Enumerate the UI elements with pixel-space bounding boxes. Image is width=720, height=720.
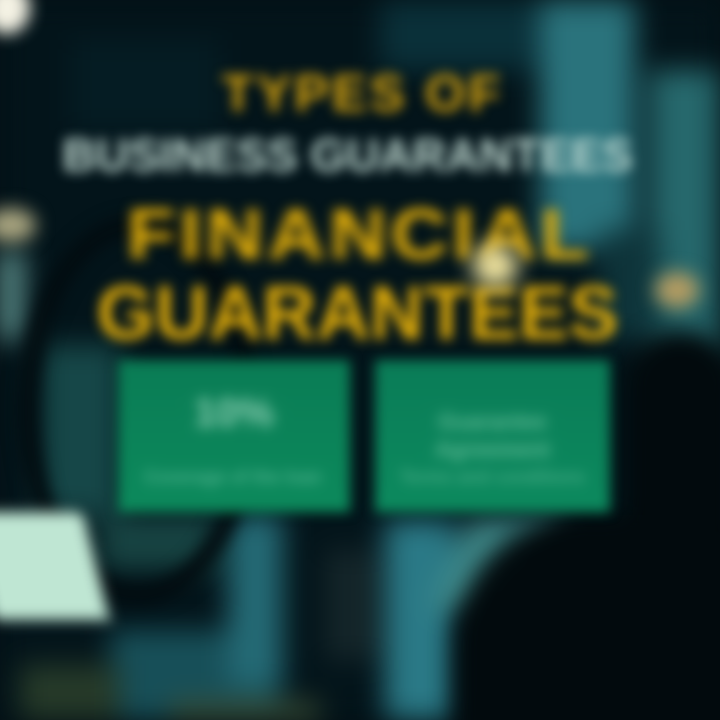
subheading: BUSINESS GUARANTEES [63, 129, 632, 181]
glow: title highlight [472, 245, 518, 287]
glow: person highlight [655, 272, 699, 308]
silhouette: person [438, 316, 720, 720]
card text: Agreement [435, 437, 550, 462]
heading block [56, 65, 638, 356]
heading: guarantees: GUARANTEES [97, 271, 618, 356]
card caption: Terms and conditions [400, 467, 585, 487]
heading: financial: FINANCIAL [127, 195, 593, 275]
glow: left lamp [0, 208, 36, 242]
glow: top left light [0, 0, 30, 34]
heading: types of: TYPES OF [222, 65, 503, 123]
card text: Guarantee [438, 409, 547, 434]
icon: laptop screen [0, 512, 109, 620]
decorative ring [18, 215, 258, 605]
card caption: Coverage of the loan [144, 467, 322, 487]
card text [432, 409, 554, 466]
card value: 10% [194, 391, 274, 435]
panel: right green card [375, 360, 610, 512]
panel: left green card [118, 360, 350, 512]
